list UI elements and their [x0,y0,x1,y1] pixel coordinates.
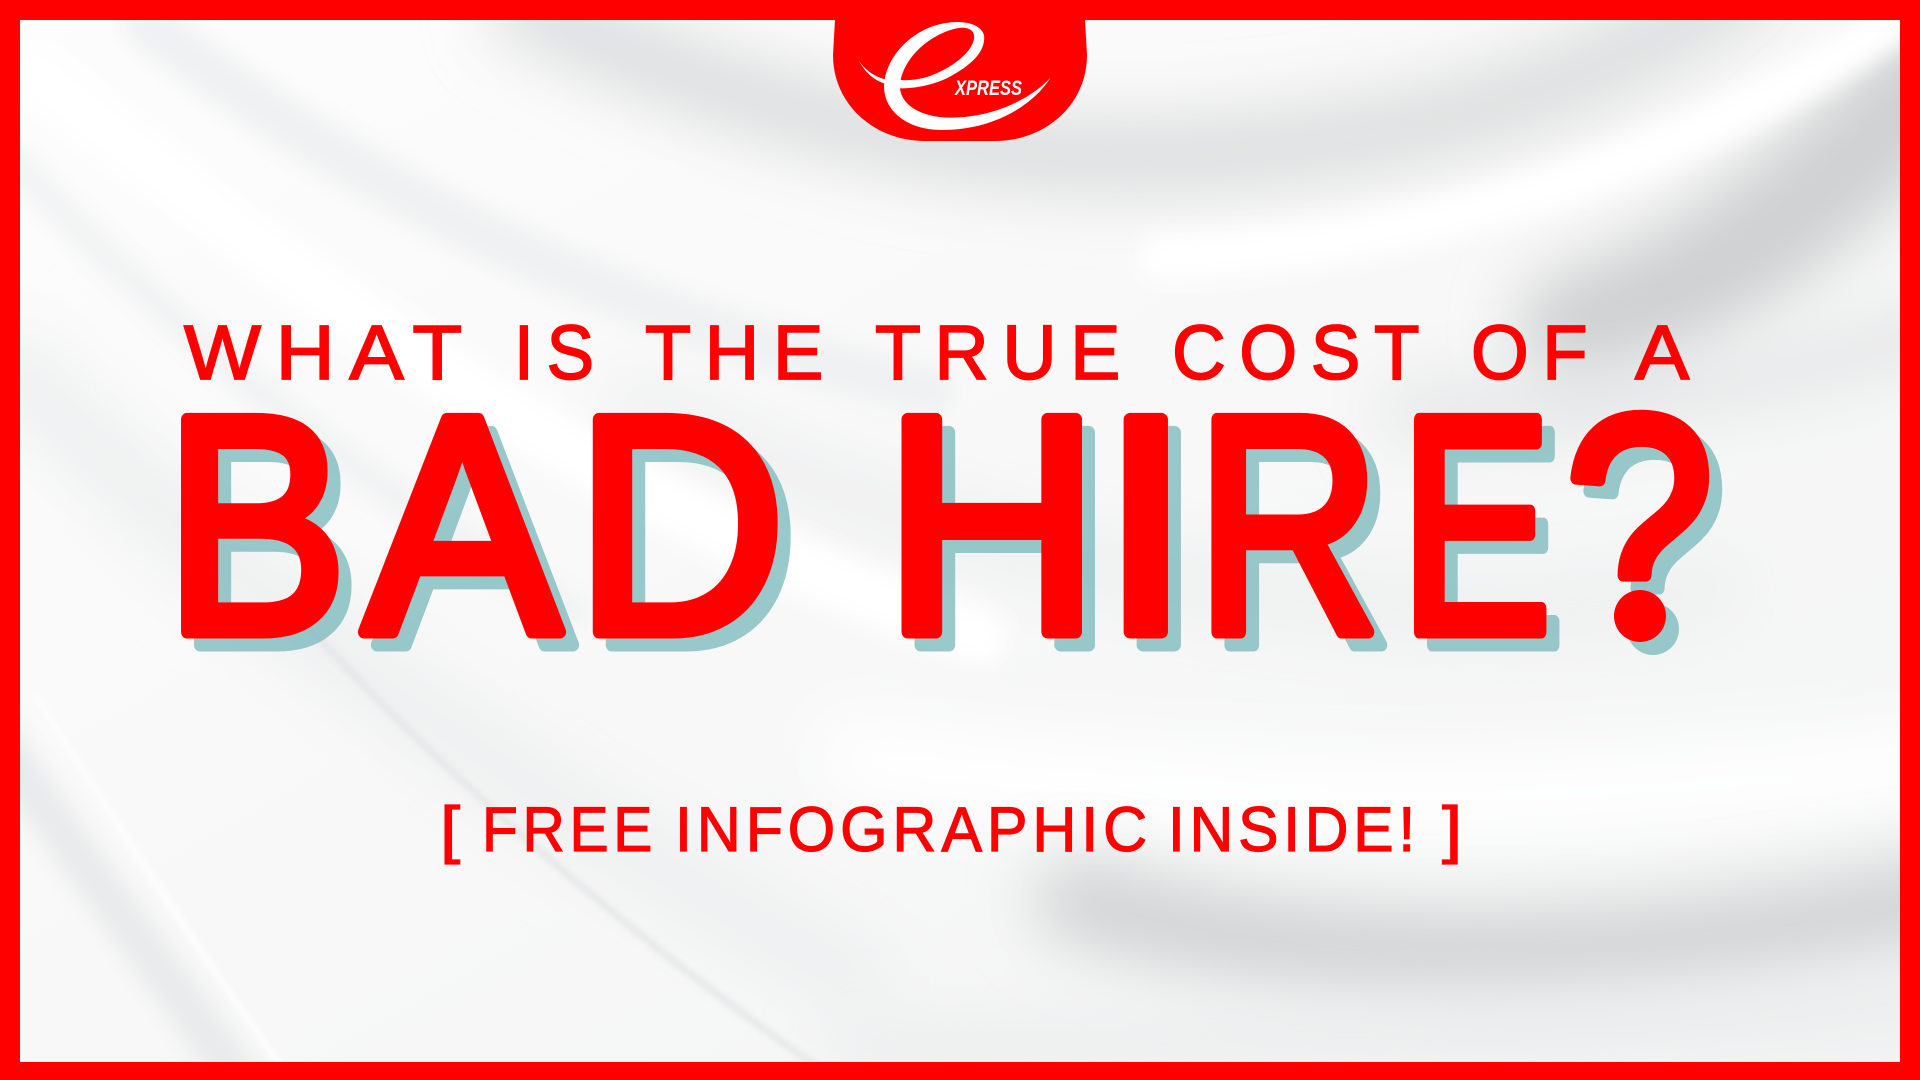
main title: bad hire?: I [1100,353,1191,698]
heading line: what is the true cost of a: COST [1172,310,1433,396]
heading line: what is the true cost of a: A [1635,310,1704,396]
heading line: what is the true cost of a [184,310,1704,396]
subtitle: free infographic inside: [ [440,795,466,865]
heading line: what is the true cost of a: IS [514,310,607,396]
subtitle: free infographic inside: ] [1442,795,1468,865]
main title: bad hire?: B [164,353,347,698]
logo wordmark: XPRESS [954,77,1022,100]
subtitle: free infographic inside: INFOGRAPHIC [675,795,1152,865]
heading line: what is the true cost of a: TRUE [875,310,1134,396]
main title: bad hire?: D [575,353,786,698]
main title: bad hire?: ? [1565,353,1714,698]
logo [833,20,1087,141]
main title: bad hire? [181,410,1722,655]
main title: bad hire?: H [883,353,1100,698]
subtitle: free infographic inside: FREE [482,795,657,865]
logo tab [833,20,1087,141]
subtitle: free infographic inside: INSIDE! [1168,795,1420,865]
main title: bad hire?: E [1400,353,1551,698]
heading line: what is the true cost of a: OF [1471,310,1601,396]
heading line: what is the true cost of a: THE [645,310,837,396]
subtitle: free infographic inside [440,795,1468,865]
heading line: what is the true cost of a: WHAT [184,310,477,396]
main title: bad hire?: A [364,353,562,698]
main title: bad hire?: R [1196,353,1381,698]
icon: e swoosh [858,22,1051,130]
